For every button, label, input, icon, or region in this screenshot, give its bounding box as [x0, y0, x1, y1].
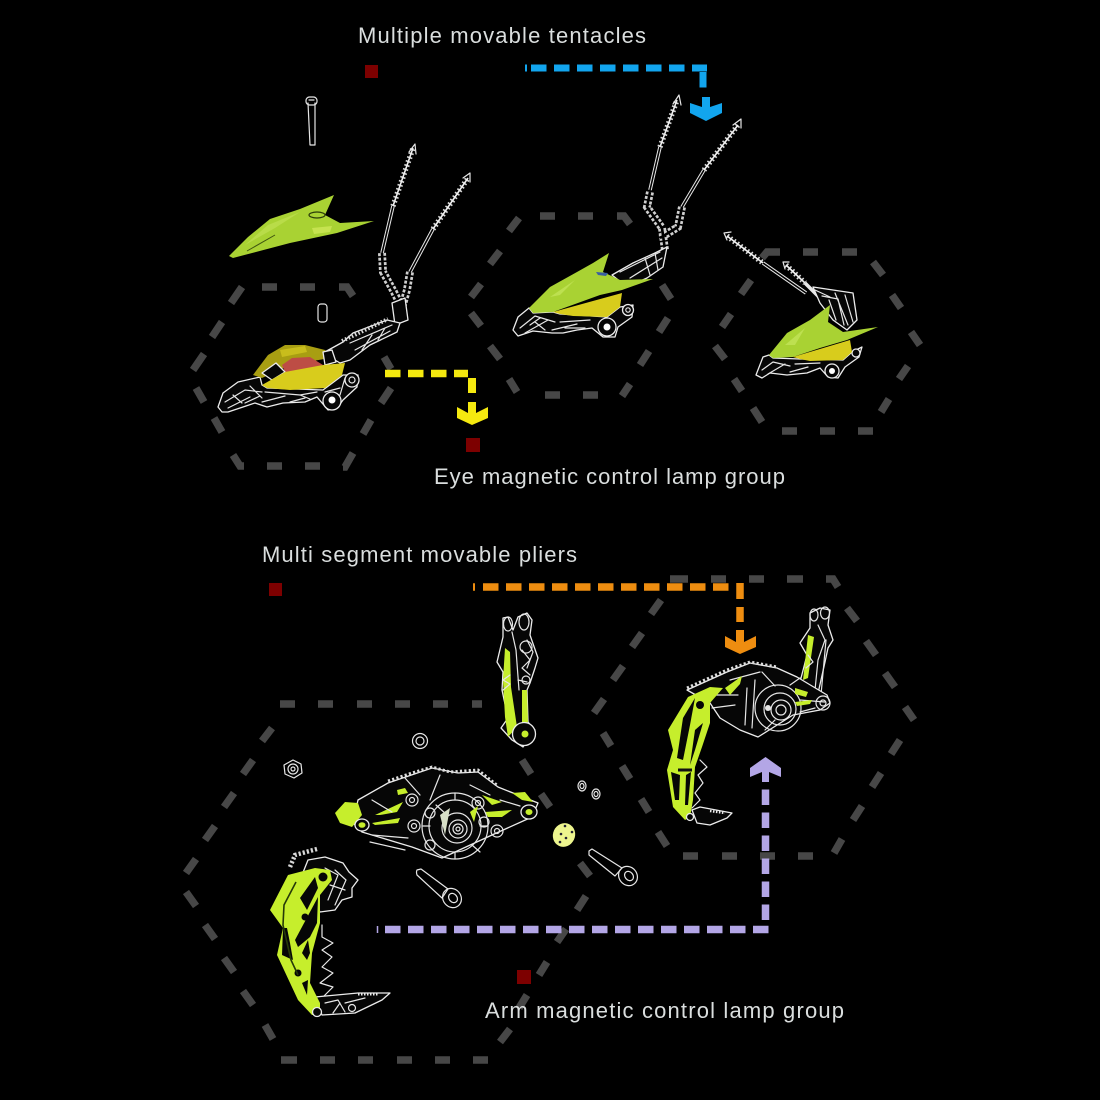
- part: nuts and washers: [284, 734, 600, 799]
- model: closed head with raised tentacles: [513, 95, 741, 337]
- mechanical base: [218, 375, 358, 412]
- arrow: purple: [378, 757, 781, 933]
- model: head with lowered tentacles: [724, 232, 878, 378]
- arm: [612, 247, 667, 287]
- tentacles: [727, 236, 763, 263]
- part: green disc: [549, 819, 579, 851]
- part: bolt left: [416, 869, 465, 911]
- part: bolt right: [589, 849, 641, 889]
- tentacles: [650, 147, 660, 190]
- red eye: [282, 357, 323, 373]
- part: central gear housing: [335, 767, 538, 859]
- tip: [692, 807, 732, 825]
- yellow shell: [553, 293, 622, 317]
- marker: tentacles: [365, 65, 378, 78]
- green shell: [529, 253, 653, 313]
- heading: multiple movable tentacles: Multiple movable tentacles: [358, 23, 646, 48]
- arrow: orange: [473, 583, 756, 654]
- part: long screw: [306, 97, 317, 145]
- model: open head with tentacles: [218, 144, 470, 412]
- green shell: [769, 305, 878, 358]
- base: [513, 305, 633, 337]
- hexagon outline: bottom right: [594, 579, 914, 856]
- hexagon outline: top right: [715, 252, 920, 431]
- heading: multi segment movable pliers: Multi segment movable pliers: [262, 542, 577, 567]
- part: green shell: [229, 195, 374, 258]
- arm block: [813, 287, 857, 330]
- yellow shell: [793, 340, 852, 361]
- green claw: [667, 687, 723, 820]
- part: lower pincer claw: [270, 849, 390, 1016]
- rear shell: [253, 345, 330, 378]
- marker: pliers: [269, 583, 282, 596]
- part: upper arm link: [497, 613, 538, 747]
- yellow shell: [262, 363, 345, 390]
- spring: [692, 760, 707, 808]
- tentacles: [382, 144, 470, 325]
- housing: [687, 663, 830, 737]
- arrow: blue: [525, 68, 722, 121]
- marker: arm lamp: [517, 970, 531, 984]
- hexagon outline: top middle: [471, 216, 671, 396]
- arm: [323, 320, 400, 363]
- marker: eye lamp: [466, 438, 480, 452]
- arrow: yellow: [385, 374, 488, 425]
- heading: arm magnetic control lamp group: Arm magnetic control lamp group: [485, 998, 844, 1023]
- heading: eye magnetic control lamp group: Eye magnetic control lamp group: [434, 464, 785, 489]
- raised link: [800, 608, 833, 698]
- hexagon outline: top left: [193, 287, 391, 467]
- part: small pin: [318, 304, 327, 322]
- base: [756, 347, 862, 378]
- model: assembled pliers: [667, 607, 833, 825]
- green parts: [335, 802, 362, 827]
- hexagon outline: bottom left: [186, 704, 590, 1060]
